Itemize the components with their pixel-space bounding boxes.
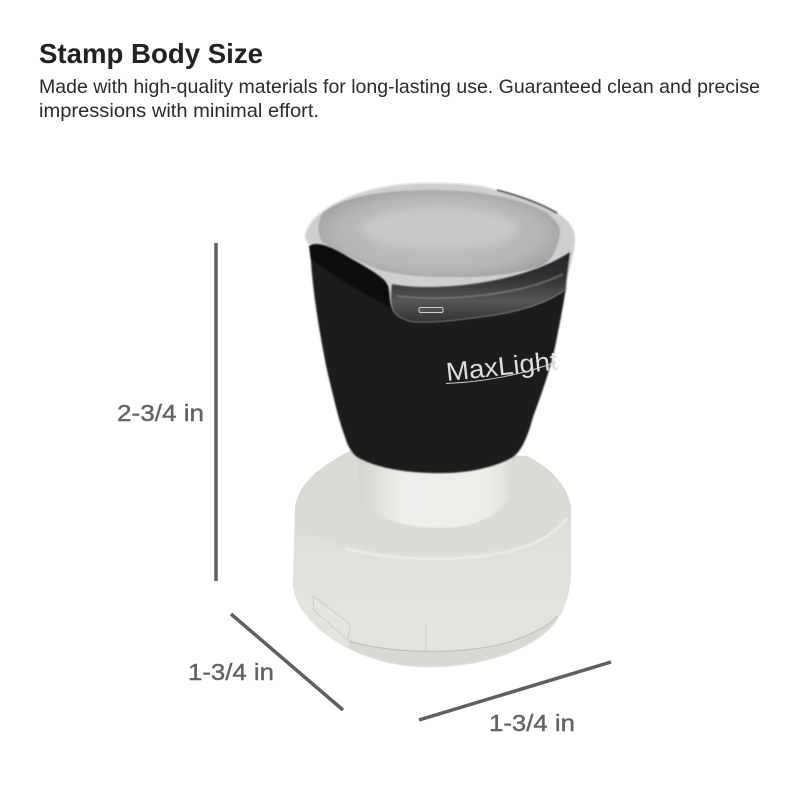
lid band reflection xyxy=(397,274,563,298)
lid top surface xyxy=(318,190,560,277)
description text: impressions with minimal effort. xyxy=(39,100,319,122)
stamp product illustration xyxy=(285,183,580,667)
base clip tab xyxy=(313,596,350,640)
lid glass outline xyxy=(305,183,575,322)
description text: Made with high-quality materials for long-lasting use. Guaranteed clean and precise xyxy=(39,76,760,98)
height label: 2-3/4 in xyxy=(117,400,204,426)
MaxLight logo: MaxLight xyxy=(444,345,560,387)
base top shading xyxy=(294,453,571,520)
lid front band xyxy=(391,252,570,322)
lid highlight xyxy=(362,208,518,248)
depth label: 1-3/4 in xyxy=(188,659,274,685)
lid latch slot xyxy=(419,308,443,312)
lid rim xyxy=(305,183,497,237)
base lower lip xyxy=(349,616,557,667)
clear lid xyxy=(305,183,575,322)
title: Stamp Body Size xyxy=(39,38,263,69)
stamp neck xyxy=(358,450,512,528)
stamp base xyxy=(293,451,571,668)
base ridge highlight xyxy=(345,518,567,559)
description text xyxy=(39,76,760,122)
height dimension line xyxy=(214,243,218,581)
depth dimension line xyxy=(231,614,343,710)
width label: 1-3/4 in xyxy=(489,710,575,736)
width dimension line xyxy=(419,662,611,720)
black body xyxy=(310,246,566,473)
body shoulder xyxy=(309,244,391,308)
